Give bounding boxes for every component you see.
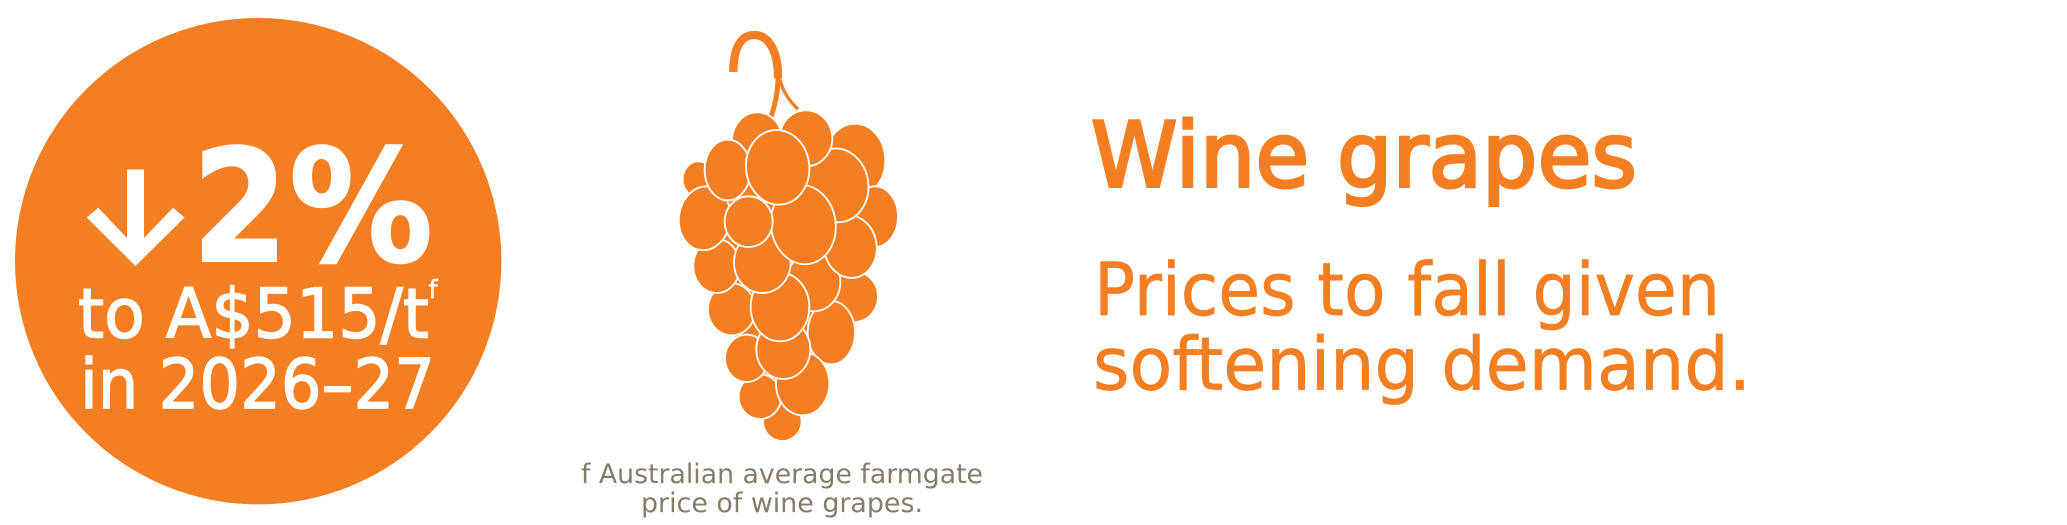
grape stem [700, 35, 860, 410]
icon: down arrow [87, 170, 184, 266]
body text: Prices to fall given [1094, 248, 1720, 333]
body text: softening demand. [1093, 322, 1751, 407]
icon: bunch of wine grapes [675, 35, 898, 441]
footnote: price of wine grapes. [641, 488, 923, 519]
price text: to A$515/t [78, 274, 429, 354]
badge circle [15, 18, 501, 504]
headline figure: 2: 2 [192, 116, 288, 298]
footnote: f Australian average farmgate [581, 459, 983, 490]
year text: in 2026–27 [80, 345, 435, 425]
panel: price change badge [15, 18, 501, 504]
heading: Wine grapes [1091, 104, 1637, 209]
footnote [581, 459, 983, 519]
body text [1093, 248, 1751, 407]
footnote marker: f [428, 275, 439, 304]
headline figure: percent sign: % [289, 116, 433, 298]
